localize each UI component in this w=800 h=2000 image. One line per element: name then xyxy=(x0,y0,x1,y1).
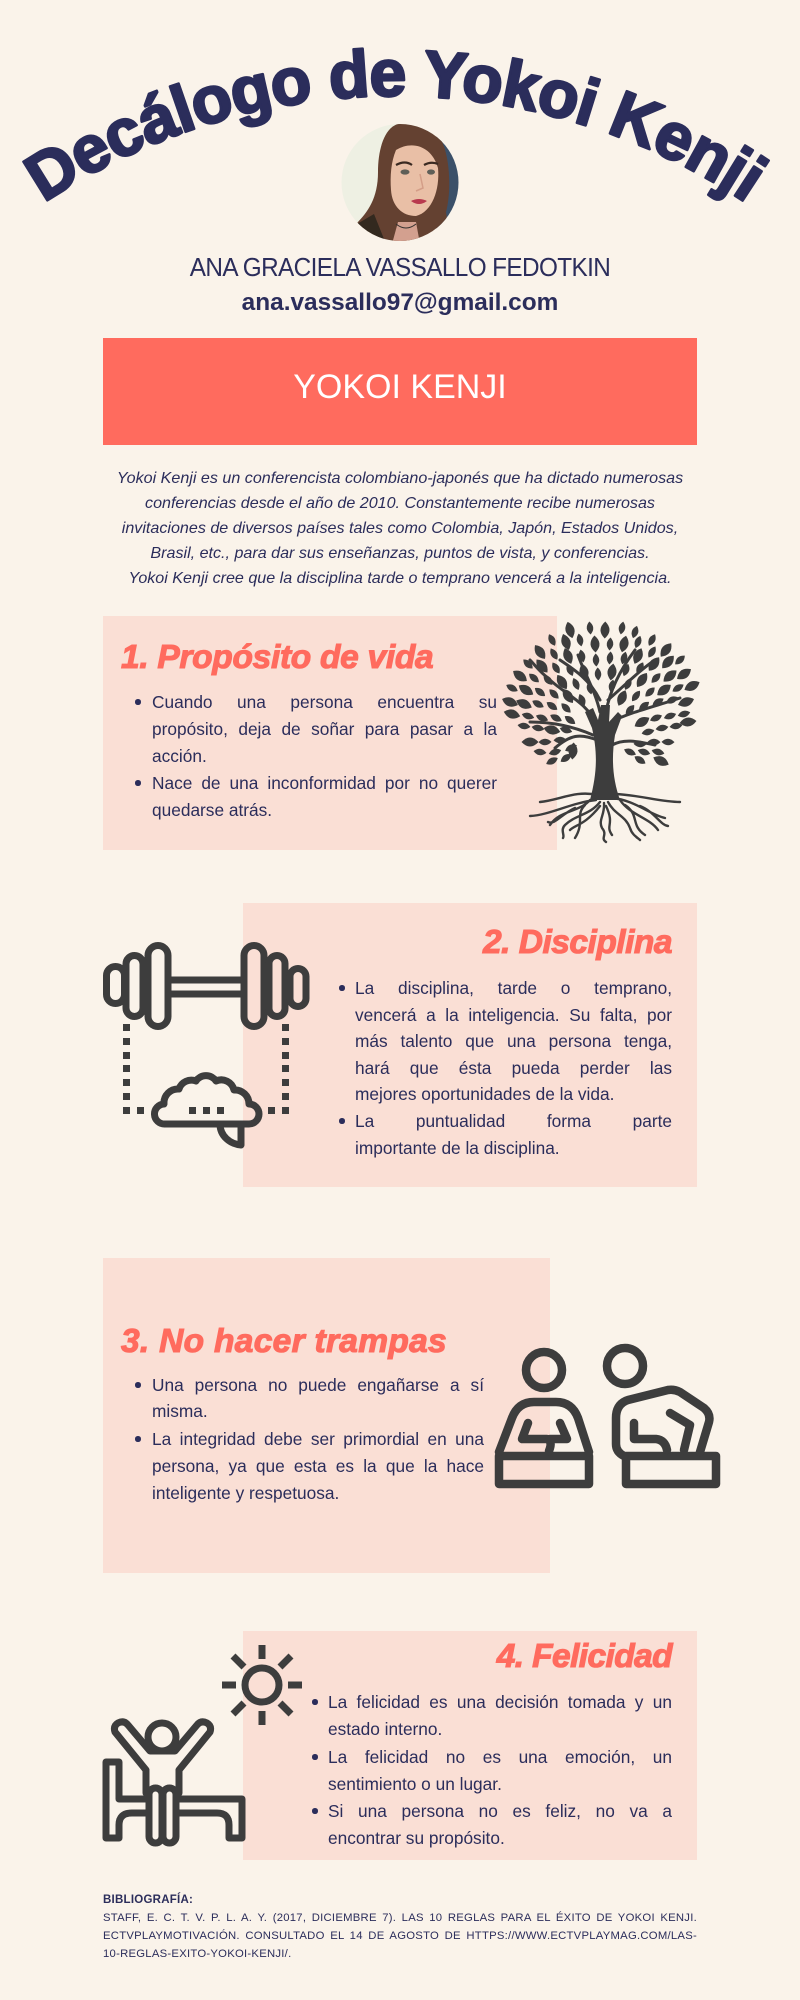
bibliography: 10-REGLAS-EXITO-YOKOI-KENJI/. xyxy=(103,1948,291,1960)
icon: tree xyxy=(502,622,700,844)
bullet list 4: sentimiento o un lugar. xyxy=(328,1774,502,1794)
intro paragraph: invitaciones de diversos países tales como Colombia, Japón, Estados Unidos, xyxy=(122,519,678,537)
bullet list 1: Nace de una inconformidad por no querer xyxy=(152,773,497,793)
author photo xyxy=(342,124,458,241)
bullet list 4: La felicidad es una decisión tomada y un xyxy=(328,1692,672,1712)
bullet list 4: Si una persona no es feliz, no va a xyxy=(328,1801,672,1821)
bullet list 4 xyxy=(312,1692,672,1848)
bibliography xyxy=(103,1892,697,1960)
banner: Yokoi Kenji xyxy=(103,338,697,445)
intro paragraph: Brasil, etc., para dar sus enseñanzas, puntos de vista, y conferencias. xyxy=(150,544,650,562)
intro paragraph xyxy=(117,469,683,587)
intro paragraph: Yokoi Kenji es un conferencista colombiano-japonés que ha dictado numerosas xyxy=(117,469,683,487)
bullet list 2: vencerá a la inteligencia. Su falta, por xyxy=(355,1005,672,1025)
bullet list 2: más talento que una persona tenga, xyxy=(355,1031,672,1051)
bullet list 3 xyxy=(135,1375,484,1503)
bullet list 3: inteligente y respetuosa. xyxy=(152,1483,339,1503)
bullet list 1: quedarse atrás. xyxy=(152,800,272,820)
bullet list 1: propósito, deja de soñar para pasar a la xyxy=(152,719,497,739)
title: Decálogo de Yokoi Kenji xyxy=(22,47,770,202)
heading 4: 4. Felicidad xyxy=(497,1638,672,1675)
bullet list 1: acción. xyxy=(152,746,207,766)
intro paragraph: Yokoi Kenji cree que la disciplina tarde o temprano vencerá a la inteligencia. xyxy=(128,569,672,587)
bullet list 2: mejores oportunidades de la vida. xyxy=(355,1084,614,1104)
panel: 3 No hacer trampas xyxy=(103,1258,550,1573)
bullet list 2: La puntualidad forma parte xyxy=(355,1111,672,1131)
bullet list 4: estado interno. xyxy=(328,1719,442,1739)
bullet list 2: La disciplina, tarde o temprano, xyxy=(355,978,672,998)
bullet list 2 xyxy=(339,978,672,1158)
intro paragraph: conferencias desde el año de 2010. Constantemente recibe numerosas xyxy=(145,494,655,512)
bibliography: STAFF, E. C. T. V. P. L. A. Y. (2017, DICIEMBRE 7). LAS 10 REGLAS PARA EL ÉXITO DE YOKOI KENJI. xyxy=(103,1912,697,1924)
banner: Yokoi Kenji: YOKOI KENJI xyxy=(293,368,507,406)
bullet list 2: importante de la disciplina. xyxy=(355,1138,560,1158)
bibliography: BIBLIOGRAFÍA: xyxy=(103,1894,193,1906)
heading 1: 1. Propósito de vida xyxy=(121,639,433,676)
panel: 4 Felicidad xyxy=(243,1631,697,1860)
bullet list 1 xyxy=(135,692,497,820)
bullet list 3: misma. xyxy=(152,1401,208,1421)
icon: barbell and brain xyxy=(103,942,310,1148)
icon: two people at desks xyxy=(494,1344,720,1488)
bullet list 2: hará que ésta pueda perder las xyxy=(355,1058,672,1078)
bullet list 3: persona, ya que esta es la que la hace xyxy=(152,1456,484,1476)
author name: ANA GRACIELA VASSALLO FEDOTKIN xyxy=(190,252,610,282)
bullet list 3: La integridad debe ser primordial en una xyxy=(152,1429,484,1449)
panel: 1 Propósito de vida xyxy=(103,616,557,850)
panel: 2 Disciplina xyxy=(243,903,697,1187)
bullet list 3: Una persona no puede engañarse a sí xyxy=(152,1375,484,1395)
heading 3: 3. No hacer trampas xyxy=(121,1323,447,1360)
bullet list 1: Cuando una persona encuentra su xyxy=(152,692,497,712)
bullet list 4: encontrar su propósito. xyxy=(328,1828,505,1848)
author email: ana.vassallo97@gmail.com xyxy=(242,289,558,316)
bullet list 4: La felicidad no es una emoción, un xyxy=(328,1747,672,1767)
heading 2: 2. Disciplina xyxy=(483,924,672,961)
bibliography: ECTVPLAYMOTIVACIÓN. CONSULTADO EL 14 DE AGOSTO DE HTTPS://WWW.ECTVPLAYMAG.COM/LAS- xyxy=(103,1930,697,1942)
